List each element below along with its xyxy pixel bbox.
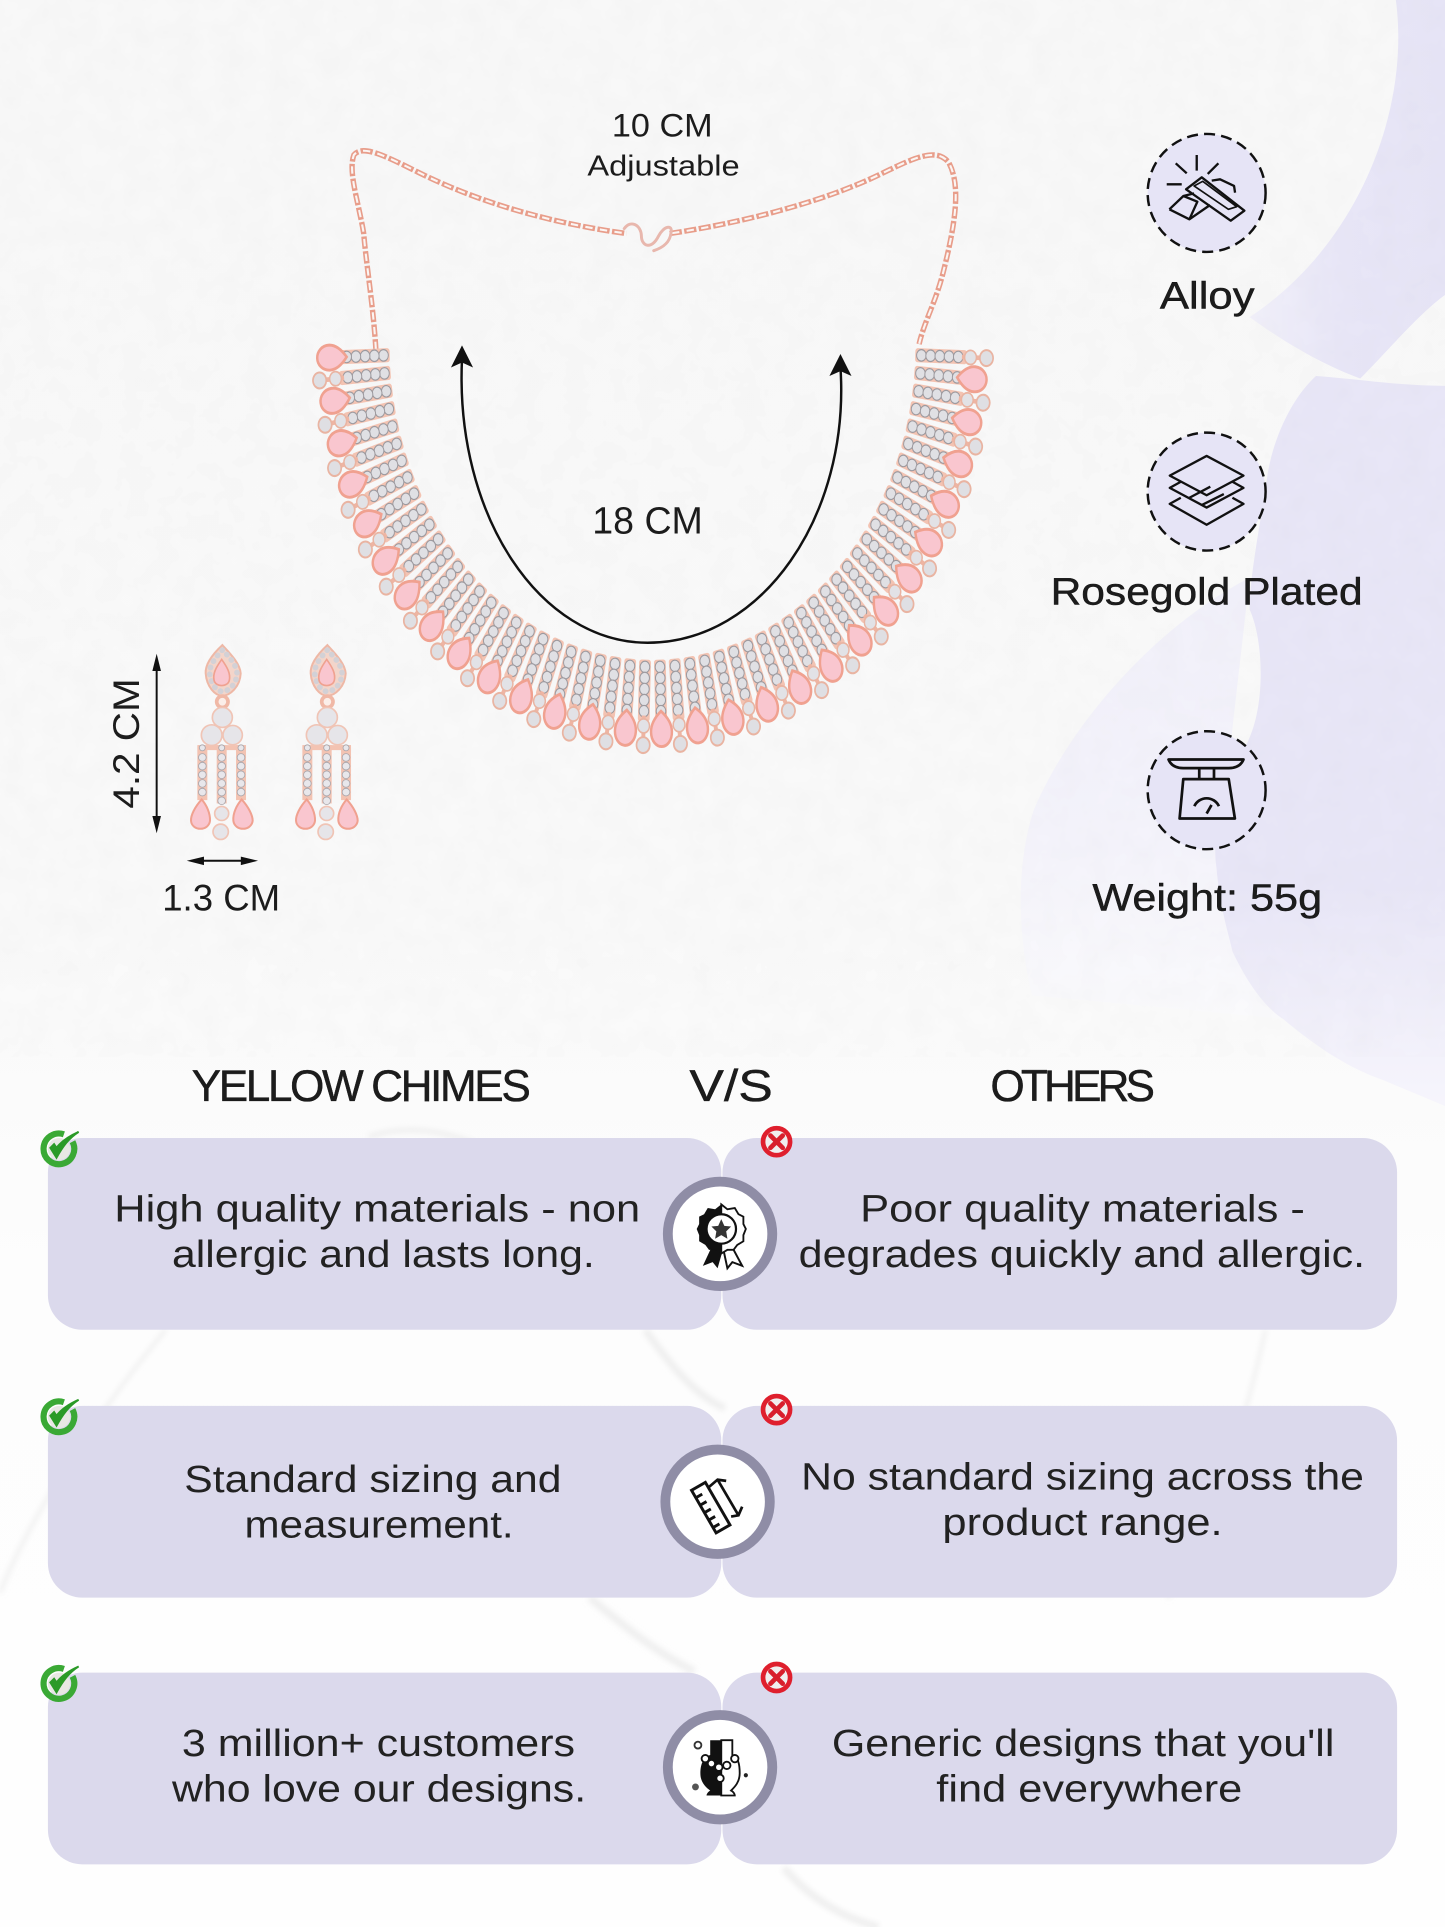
panel: others sizing: product range. (942, 1502, 1223, 1544)
panel: others quality: Poor quality materials - (860, 1189, 1305, 1231)
label: chain length: Adjustable (587, 150, 740, 182)
panel: yellow chimes quality: High quality materials - non (114, 1189, 640, 1231)
spec: weight (1092, 731, 1322, 920)
icon: gold bars (1148, 134, 1266, 252)
icon: red cross (763, 1128, 790, 1155)
chain extender (352, 151, 956, 351)
arrow: earring width (187, 857, 258, 865)
label: Weight: 55g (1092, 878, 1322, 920)
label: earring height: 4.2 CM (106, 678, 147, 809)
label: Alloy (1160, 275, 1255, 317)
panel: others designs: find everywhere (936, 1769, 1242, 1811)
icon: layers (1148, 433, 1266, 551)
label: chain length (587, 107, 740, 182)
panel: others sizing: No standard sizing across the (801, 1456, 1364, 1498)
label: earring width: 1.3 CM (162, 878, 280, 919)
clasp (624, 224, 671, 251)
icon: green check (44, 1666, 79, 1699)
panel: yellow chimes quality (48, 1138, 721, 1330)
panel: yellow chimes quality: allergic and lasts long. (172, 1234, 595, 1276)
spec: plating (1051, 433, 1363, 614)
label: necklace length: 18 CM (592, 500, 703, 542)
necklace collar of stone bars and pink drops (312, 343, 993, 753)
panel: others designs (722, 1673, 1397, 1864)
necklace with chain (312, 151, 993, 753)
icon: red cross (763, 1396, 790, 1423)
comparison headers (192, 1062, 1155, 1111)
panel: yellow chimes sizing: measurement. (245, 1504, 514, 1546)
icon: red cross (763, 1664, 790, 1691)
arrow: earring height (152, 654, 161, 833)
arrow: necklace curve (451, 345, 852, 643)
background: faint swirls in lower section (0, 1130, 1266, 1927)
icon: green check (44, 1400, 79, 1432)
background: upper lilac blob (1250, 0, 1445, 379)
icon: quality medal badge (668, 1182, 772, 1286)
panel: yellow chimes designs: 3 million+ customers (182, 1723, 575, 1765)
panel: yellow chimes designs (48, 1673, 721, 1864)
comparison headers: YELLOW CHIMES (192, 1062, 531, 1111)
panel: others sizing (722, 1406, 1397, 1598)
panel: others quality: degrades quickly and allergic. (799, 1234, 1365, 1276)
panel: others quality (722, 1138, 1397, 1330)
panel: yellow chimes designs: who love our designs. (171, 1769, 586, 1811)
background: paper texture (0, 0, 1445, 1057)
comparison row 3: designs (44, 1664, 1397, 1864)
icon: ruler and arrow (665, 1450, 770, 1554)
panel: yellow chimes sizing (48, 1406, 721, 1598)
label: chain length: 10 CM (612, 107, 713, 143)
spec: alloy (1148, 134, 1266, 317)
label: Rosegold Plated (1051, 572, 1363, 614)
icon: vase with beads (668, 1715, 772, 1819)
comparison row 1: quality (44, 1128, 1397, 1330)
earrings (191, 645, 358, 839)
comparison row 2: sizing (44, 1396, 1397, 1598)
background: lower lilac blob (1215, 376, 1445, 1106)
icon: weighing scale (1148, 731, 1266, 849)
background: soft lilac lobe (1021, 578, 1283, 1019)
icon: green check (44, 1132, 79, 1164)
panel: yellow chimes sizing: Standard sizing and (184, 1459, 562, 1501)
comparison headers: V/S (689, 1062, 773, 1111)
comparison headers: OTHERS (990, 1062, 1155, 1111)
panel: others designs: Generic designs that you'll (832, 1723, 1334, 1765)
